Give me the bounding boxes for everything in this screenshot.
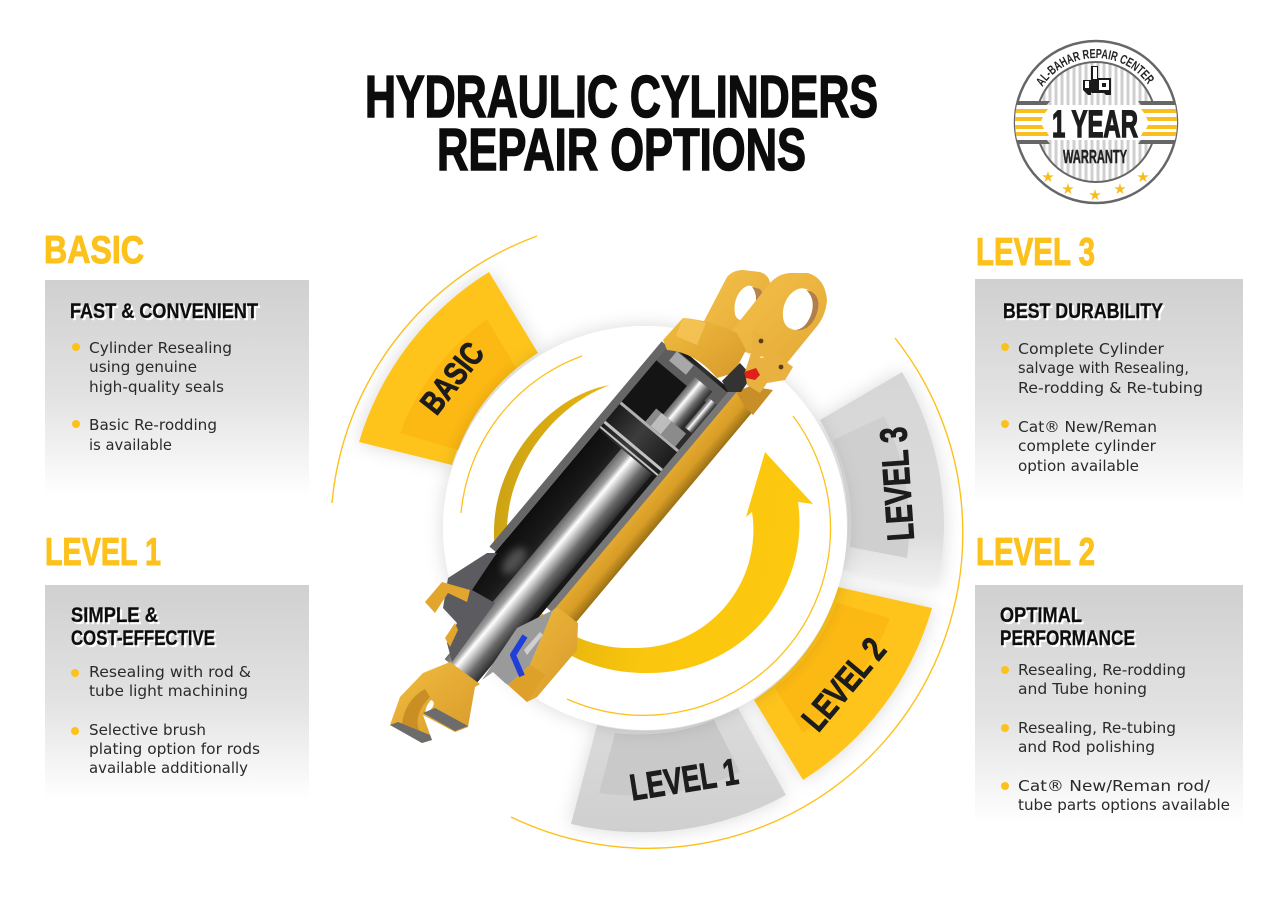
segment patch: level 2 xyxy=(775,603,890,733)
badge: stars: ★ xyxy=(1136,168,1150,186)
bullets: level 2: and Rod polishing xyxy=(1018,738,1155,756)
subheading: simple and cost-effective: COST-EFFECTIVE xyxy=(71,627,215,650)
cylinder: clevis front lug xyxy=(730,273,827,363)
tube: upper wall xyxy=(489,341,668,552)
bullets: level 3: salvage with Resealing, xyxy=(1018,359,1189,377)
cylinder: clevis front lug bore xyxy=(787,290,818,330)
cylinder: rod eye cut face right xyxy=(423,708,468,731)
segment label: level 1: LEVEL 1 xyxy=(627,751,741,808)
outer arc: levels side xyxy=(511,338,963,848)
segment label: basic: BASIC xyxy=(413,335,491,421)
badge: stars xyxy=(1041,168,1150,204)
title xyxy=(365,64,878,183)
bullets: level 1 xyxy=(71,663,260,777)
badge: stars: ★ xyxy=(1088,186,1102,204)
subheading: simple and cost-effective xyxy=(71,604,215,650)
outer arc: basic side xyxy=(332,236,537,503)
subheading: optimal performance: OPTIMAL xyxy=(1000,604,1082,627)
bullets: level 2: Cat® New/Reman rod/ xyxy=(1018,777,1211,795)
cylinder: clevis back lug xyxy=(703,270,770,345)
heading: level 2: LEVEL 2 xyxy=(976,531,1095,574)
bullets: level 3 xyxy=(1001,340,1203,475)
cylinder: yellow bracket two xyxy=(445,623,458,647)
badge: stars: ★ xyxy=(1061,180,1075,198)
tube: bore interior xyxy=(467,341,730,634)
bullets: level 3: Cat® New/Reman xyxy=(1018,418,1157,436)
inner arc: left xyxy=(461,356,582,513)
bullets: level 3: option available xyxy=(1018,457,1139,475)
segment label: level 2: LEVEL 2 xyxy=(795,631,894,739)
tube: yellow outer skin xyxy=(554,388,759,625)
tube: upper small rod xyxy=(661,377,712,431)
segment: level 2 xyxy=(754,587,932,780)
panel: level 2 xyxy=(975,531,1243,825)
panel: level 3 xyxy=(975,231,1243,505)
tube: second small chrome xyxy=(685,398,717,434)
cylinder: mounting plate xyxy=(745,330,793,393)
bullets: basic: using genuine xyxy=(89,358,197,376)
tube: piston xyxy=(598,402,679,477)
badge: centre band xyxy=(1010,101,1182,144)
cylinder: blue seal xyxy=(513,636,525,676)
badge: curved name xyxy=(1032,58,1160,122)
subheading: simple and cost-effective: SIMPLE & xyxy=(71,604,158,627)
bullets: basic: is available xyxy=(89,436,172,454)
bullets: level 1: tube light machining xyxy=(89,682,248,700)
tube: bore interior beyond piston xyxy=(621,344,727,451)
cylinder: rod eye inner ring xyxy=(402,689,430,733)
badge: 1 year text: 1 YEAR xyxy=(1052,104,1138,146)
badge: warranty text: WARRANTY xyxy=(1063,147,1127,167)
segment label: level 3: LEVEL 3 xyxy=(873,426,923,542)
bullets: level 2: Resealing, Re-tubing xyxy=(1018,719,1176,737)
cylinder: tube section xyxy=(416,331,759,709)
bullets: level 1: available additionally xyxy=(89,759,248,777)
cylinder: yellow gland end face xyxy=(508,665,545,702)
heading: level 1: LEVEL 1 xyxy=(45,531,161,574)
bullets: level 1: Resealing with rod & xyxy=(89,663,251,681)
bullets: level 3: Complete Cylinder xyxy=(1018,340,1165,358)
cylinder: rod eye notch xyxy=(426,700,434,714)
cylinder: seal pin xyxy=(524,632,543,655)
cylinder: lower yellow gland xyxy=(508,607,578,702)
subheading: fast and convenient: FAST & CONVENIENT xyxy=(70,300,258,323)
segment patch: level 1 xyxy=(599,720,740,795)
cylinder: clevis back lug bore xyxy=(745,287,762,320)
bullets: level 2: and Tube honing xyxy=(1018,680,1147,698)
badge: 1 year warranty xyxy=(1014,40,1178,204)
segment: level 3 xyxy=(820,372,944,585)
badge: stars: ★ xyxy=(1113,180,1127,198)
bullets: level 2 xyxy=(1001,661,1230,814)
cylinder: neck xyxy=(736,386,773,415)
title: HYDRAULIC CYLINDERS xyxy=(365,64,878,130)
bullets: level 3: Re-rodding & Re-tubing xyxy=(1018,379,1203,397)
cylinder: yellow bracket one xyxy=(425,582,470,613)
bullets: level 1: Selective brush xyxy=(89,721,206,739)
subheading: optimal performance: PERFORMANCE xyxy=(1000,627,1135,650)
heading: basic: BASIC xyxy=(44,229,144,272)
panel: level 1 xyxy=(45,531,309,800)
bullets: level 3: complete cylinder xyxy=(1018,437,1157,455)
bullets: level 2: tube parts options available xyxy=(1018,796,1230,814)
bullets: basic: Cylinder Resealing xyxy=(89,339,232,357)
title: REPAIR OPTIONS xyxy=(437,117,806,183)
segment patch: level 3 xyxy=(833,416,909,558)
panel: basic xyxy=(44,229,309,497)
circular arrow xyxy=(494,385,813,673)
segment: basic xyxy=(359,272,538,465)
bullets: basic: high-quality seals xyxy=(89,378,224,396)
cylinder: port dark block xyxy=(722,363,752,392)
tube: bore highlight xyxy=(498,543,531,578)
subheading: optimal performance xyxy=(1000,604,1135,650)
segment: level 1 xyxy=(571,708,786,832)
cylinder: lower grey section xyxy=(482,610,553,685)
badge: stars: ★ xyxy=(1041,168,1055,186)
cylinder: rod eye xyxy=(390,662,480,743)
segment patch: basic xyxy=(400,319,516,450)
tube: piston nut xyxy=(645,409,686,447)
bullets: basic: Basic Re-rodding xyxy=(89,416,217,434)
tube: chrome rod xyxy=(445,449,652,685)
badge: striped inner disc xyxy=(1042,63,1151,181)
cylinder: collar band xyxy=(676,318,706,345)
bullets: basic xyxy=(72,339,232,454)
cylinder: rod eye cut face left xyxy=(390,722,432,743)
cylinder: red fitting xyxy=(744,368,760,380)
bullets: level 2: Resealing, Re-rodding xyxy=(1018,661,1186,679)
subheading: best durability: BEST DURABILITY xyxy=(1003,300,1163,323)
cylinder: head collar xyxy=(663,318,746,378)
bullets: level 1: plating option for rods xyxy=(89,740,260,758)
heading: level 3: LEVEL 3 xyxy=(976,231,1095,274)
tube: inner wall lower xyxy=(547,388,736,612)
white central disc xyxy=(443,326,847,730)
cylinder: lower upper-gland grey block xyxy=(443,553,497,662)
inner arc: right xyxy=(567,416,831,715)
badge: logo xyxy=(1083,66,1111,95)
badge: 1 year warranty: AL-BAHAR REPAIR CENTER xyxy=(1036,49,1154,87)
cylinder illustration xyxy=(390,270,827,743)
